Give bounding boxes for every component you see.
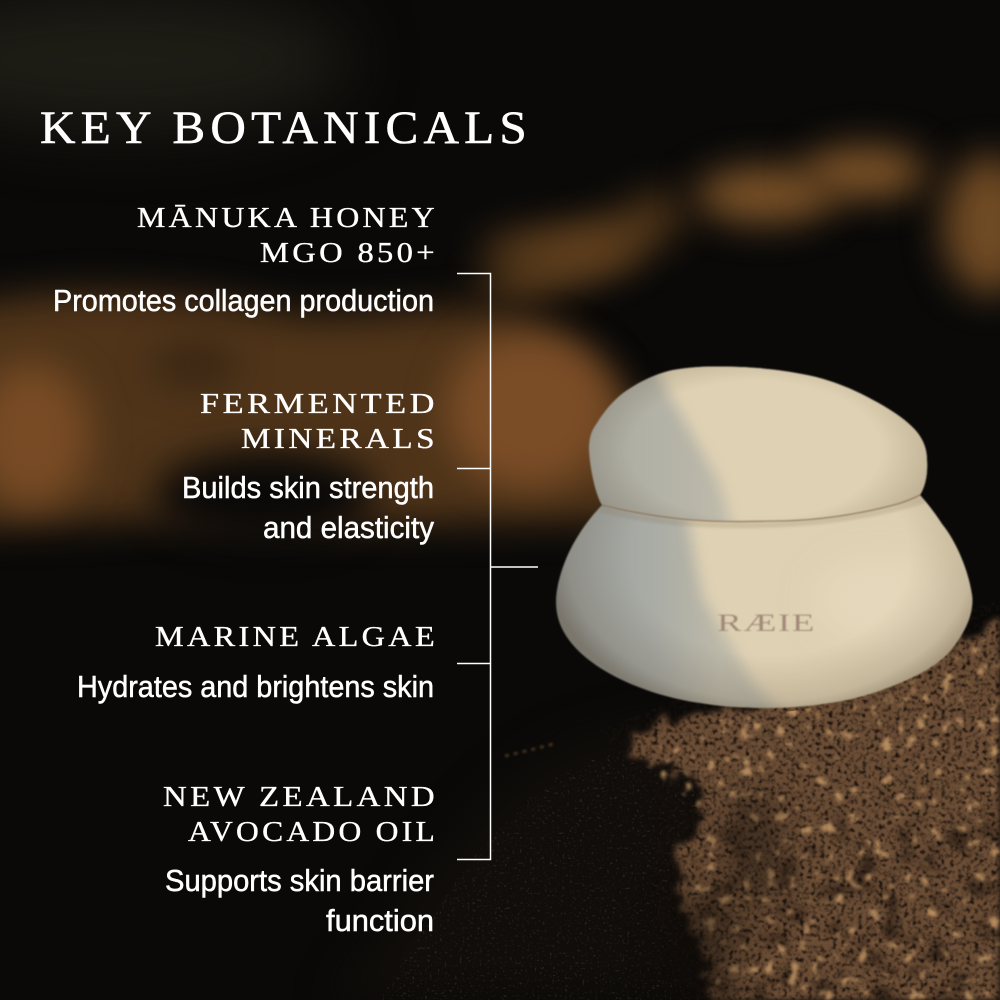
botanical: marine algae: Hydrates and brightens skin xyxy=(77,669,434,704)
jar lid xyxy=(588,366,928,523)
botanical: new zealand avocado oil: AVOCADO OIL xyxy=(188,816,438,848)
botanical: fermented minerals xyxy=(182,388,438,545)
botanical: new zealand avocado oil: function xyxy=(326,903,434,938)
lit side of mound xyxy=(600,600,1000,1000)
dark side of mound xyxy=(330,714,800,1000)
botanical: new zealand avocado oil: Supports skin barrier xyxy=(165,863,434,898)
botanical: manuka honey: Promotes collagen production xyxy=(53,283,434,318)
jar xyxy=(555,366,974,709)
botanical: fermented minerals: FERMENTED xyxy=(200,388,438,420)
botanical: new zealand avocado oil: NEW ZEALAND xyxy=(163,781,438,813)
botanical: fermented minerals: and elasticity xyxy=(263,510,434,545)
botanical: fermented minerals: Builds skin strength xyxy=(182,470,434,505)
soil mound xyxy=(330,600,1000,1000)
botanical: marine algae xyxy=(77,621,438,704)
botanical: fermented minerals: MINERALS xyxy=(241,423,438,455)
jar base xyxy=(555,494,974,709)
bracket connector xyxy=(457,274,538,860)
botanical: manuka honey: MĀNUKA HONEY xyxy=(137,202,438,234)
jar logo: RÆIE xyxy=(717,610,816,637)
botanical: manuka honey: MGO 850+ xyxy=(260,237,438,269)
botanical: new zealand avocado oil xyxy=(163,781,438,938)
botanical: marine algae: MARINE ALGAE xyxy=(155,621,438,653)
botanical: manuka honey xyxy=(53,202,438,318)
title: KEY BOTANICALS xyxy=(40,102,532,154)
